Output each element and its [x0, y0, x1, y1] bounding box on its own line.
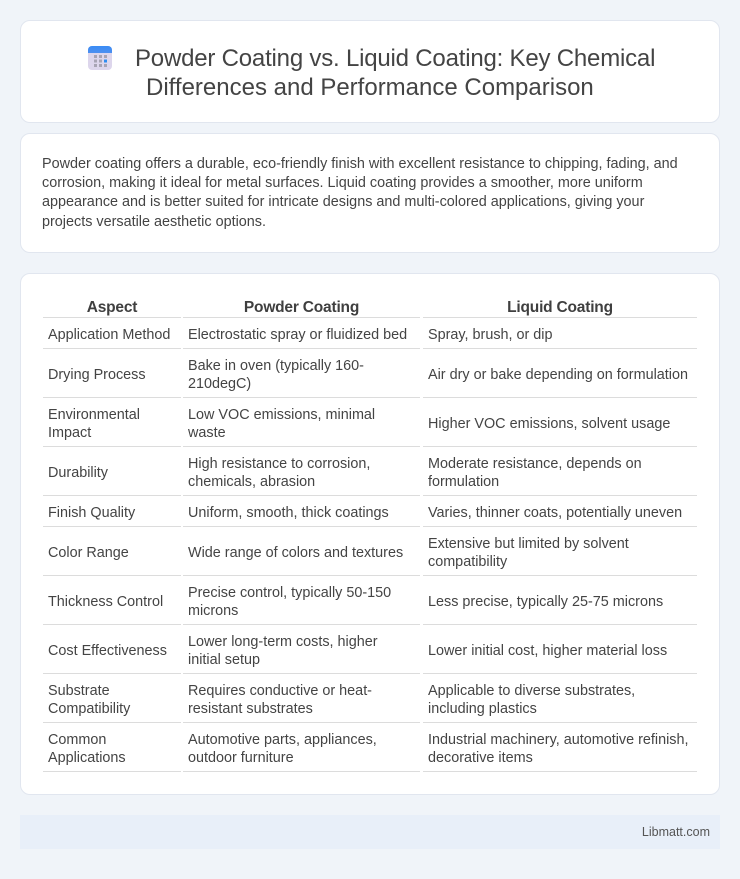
comparison table: Air dry or bake depending on formulation — [428, 367, 688, 383]
comparison table: High resistance to corrosion, — [188, 456, 370, 472]
intro text: Powder coating offers a durable, eco-friendly finish with excellent resistance to chipping, fading, and — [42, 156, 678, 172]
intro text: projects versatile aesthetic options. — [42, 214, 266, 230]
comparison table: Electrostatic spray or fluidized bed — [188, 327, 407, 343]
icon: calendar grid — [88, 46, 112, 70]
row: durability — [48, 456, 642, 490]
comparison table: Low VOC emissions, minimal — [188, 407, 375, 423]
comparison table: Moderate resistance, depends on — [428, 456, 642, 472]
comparison table: Bake in oven (typically 160- — [188, 358, 364, 374]
comparison table: Varies, thinner coats, potentially uneven — [428, 505, 682, 521]
row: common applications — [48, 732, 688, 766]
comparison table: Precise control, typically 50-150 — [188, 585, 391, 601]
comparison table: Finish Quality — [48, 505, 135, 521]
table panel — [20, 273, 720, 795]
comparison table: Automotive parts, appliances, — [188, 732, 377, 748]
title: Differences and Performance Comparison — [146, 74, 594, 101]
table header: Liquid Coating — [507, 299, 613, 316]
comparison table: Cost Effectiveness — [48, 643, 167, 659]
comparison table: Spray, brush, or dip — [428, 327, 553, 343]
title — [135, 45, 655, 101]
comparison table: resistant substrates — [188, 701, 313, 717]
comparison table: outdoor furniture — [188, 750, 294, 766]
comparison table: Lower long-term costs, higher — [188, 634, 378, 650]
row: finish quality — [48, 505, 682, 521]
comparison table: Impact — [48, 425, 91, 441]
comparison table: Thickness Control — [48, 594, 163, 610]
comparison table: waste — [188, 425, 226, 441]
row: cost effectiveness — [48, 634, 667, 668]
comparison table: Common — [48, 732, 106, 748]
comparison table: microns — [188, 603, 238, 619]
header card — [20, 20, 720, 123]
comparison table: Industrial machinery, automotive refinish, — [428, 732, 688, 748]
comparison table: formulation — [428, 474, 499, 490]
footer bar — [20, 815, 720, 849]
title: Powder Coating vs. Liquid Coating: Key Chemical — [135, 45, 655, 72]
row: application method — [48, 327, 553, 343]
comparison table: Color Range — [48, 545, 129, 561]
table header: Aspect — [87, 299, 137, 316]
comparison table: Lower initial cost, higher material loss — [428, 643, 667, 659]
comparison table: 210degC) — [188, 376, 251, 392]
comparison table: Higher VOC emissions, solvent usage — [428, 416, 670, 432]
comparison table: Drying Process — [48, 367, 146, 383]
comparison table: decorative items — [428, 750, 533, 766]
table header — [87, 299, 613, 316]
row: color range — [48, 536, 629, 570]
comparison table: compatibility — [428, 554, 507, 570]
comparison table: Wide range of colors and textures — [188, 545, 403, 561]
intro panel — [20, 133, 720, 253]
comparison table: Applicable to diverse substrates, — [428, 683, 635, 699]
row: thickness control — [48, 585, 663, 619]
comparison table: Extensive but limited by solvent — [428, 536, 629, 552]
table header: Powder Coating — [244, 299, 359, 316]
intro text — [42, 156, 678, 230]
comparison table: Application Method — [48, 327, 170, 343]
intro text: appearance and is better suited for intricate designs and multi-colored applications, giving your — [42, 194, 644, 210]
row: environmental impact — [48, 407, 670, 441]
comparison table: Substrate — [48, 683, 110, 699]
footer text: Libmatt.com — [642, 825, 710, 839]
intro text: corrosion, making it ideal for metal surfaces. Liquid coating provides a smoother, more uniform — [42, 175, 643, 191]
comparison table — [43, 299, 697, 772]
comparison table: Uniform, smooth, thick coatings — [188, 505, 389, 521]
comparison table: Requires conductive or heat- — [188, 683, 372, 699]
comparison table: initial setup — [188, 652, 260, 668]
comparison table: chemicals, abrasion — [188, 474, 315, 490]
comparison table: Compatibility — [48, 701, 130, 717]
row: substrate compatibility — [48, 683, 635, 717]
comparison table: Applications — [48, 750, 126, 766]
comparison table: Less precise, typically 25-75 microns — [428, 594, 663, 610]
row: drying process — [48, 358, 688, 392]
comparison table: Environmental — [48, 407, 140, 423]
comparison table: including plastics — [428, 701, 537, 717]
comparison table: Durability — [48, 465, 108, 481]
